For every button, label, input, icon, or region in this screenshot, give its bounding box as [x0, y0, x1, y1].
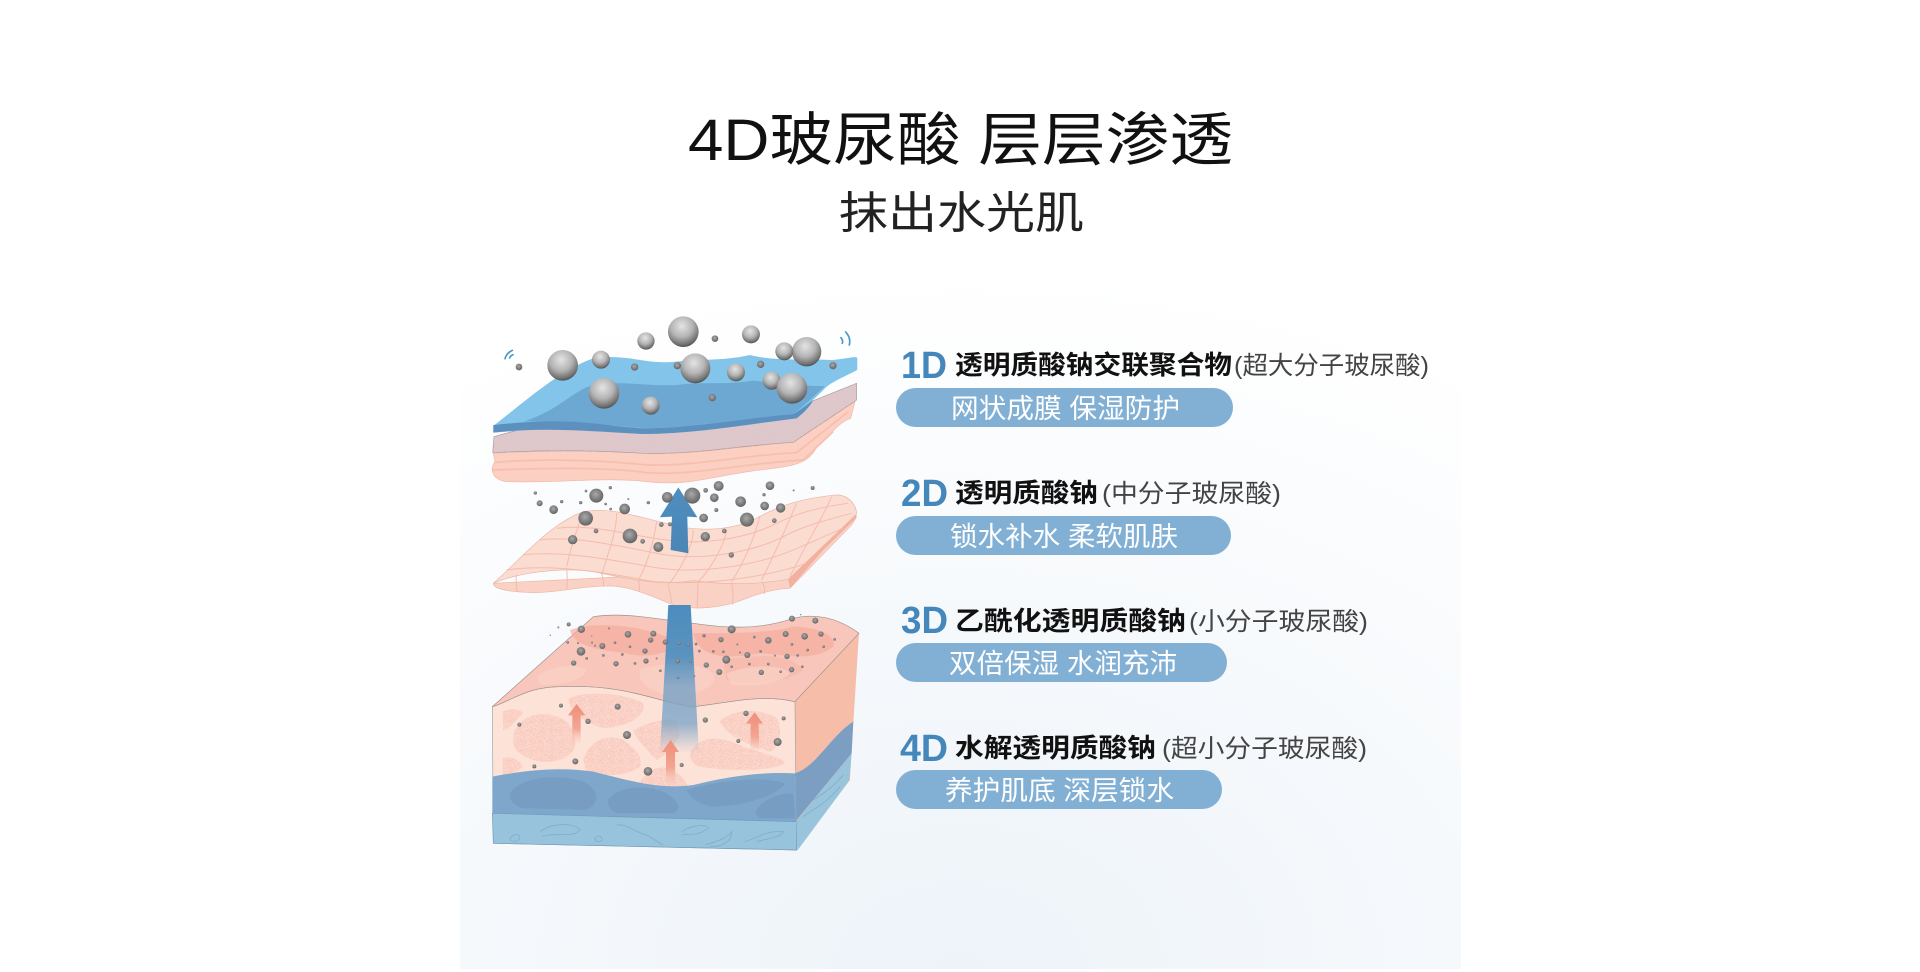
item 2 [896, 473, 1281, 555]
layer 3: skin block [492, 605, 859, 851]
1D ingredient: 透明质酸钠交联聚合物 [955, 350, 1232, 380]
sheet particles [534, 481, 815, 558]
fat cells [503, 694, 785, 793]
1D label: 1D [901, 345, 947, 387]
item 1 [896, 345, 1429, 427]
2D ingredient: 透明质酸钠 [955, 478, 1098, 508]
sheet grid [507, 497, 852, 608]
3D ingredient: 乙酰化透明质酸钠 [955, 606, 1186, 636]
title: 4D玻尿酸 层层渗透 [688, 108, 1233, 173]
upward arrow [660, 487, 697, 553]
1D benefit: 网状成膜 保湿防护 [951, 394, 1180, 424]
layer 2: grid skin sheet [493, 481, 857, 608]
3D benefit: 双倍保湿 水润充沛 [949, 649, 1177, 679]
grainy layer [493, 383, 857, 454]
surface particles [550, 614, 836, 679]
surface mottling [570, 625, 834, 683]
blue dermis band [492, 753, 852, 851]
subtitle: 抹出水光肌 [839, 189, 1084, 238]
2D molecule size: (中分子玻尿酸) [1102, 480, 1281, 508]
layer 1: film layer with spheres [492, 316, 857, 483]
4D pill [896, 770, 1222, 809]
dermis particles [517, 704, 786, 776]
4D molecule size: (超小分子玻尿酸) [1162, 735, 1367, 763]
blue film [493, 355, 857, 434]
2D label: 2D [901, 473, 948, 515]
central penetration beam [660, 605, 699, 753]
3D label: 3D [901, 600, 948, 642]
4D label: 4D [900, 728, 948, 770]
background panel [460, 270, 1461, 969]
salmon arrows [568, 704, 763, 787]
2D pill [896, 516, 1231, 555]
sheet body [493, 495, 857, 608]
block top surface [492, 615, 859, 707]
spheres [547, 316, 821, 415]
1D molecule size: (超大分子玻尿酸) [1234, 352, 1429, 380]
block right side [795, 633, 859, 850]
blue lower layer [492, 722, 853, 822]
item 4 [896, 728, 1367, 809]
block front [492, 686, 797, 850]
striped skin base [492, 402, 855, 483]
illustration: skin layers [492, 316, 859, 851]
4D benefit: 养护肌底 深层锁水 [945, 776, 1174, 806]
1D pill [896, 388, 1233, 427]
2D benefit: 锁水补水 柔软肌肤 [950, 522, 1178, 552]
icons: moisture ticks [505, 332, 850, 359]
small particles [516, 335, 837, 401]
3D molecule size: (小分子玻尿酸) [1189, 608, 1368, 636]
item 3 [896, 600, 1368, 682]
3D pill [896, 643, 1227, 682]
4D ingredient: 水解透明质酸钠 [955, 733, 1156, 763]
